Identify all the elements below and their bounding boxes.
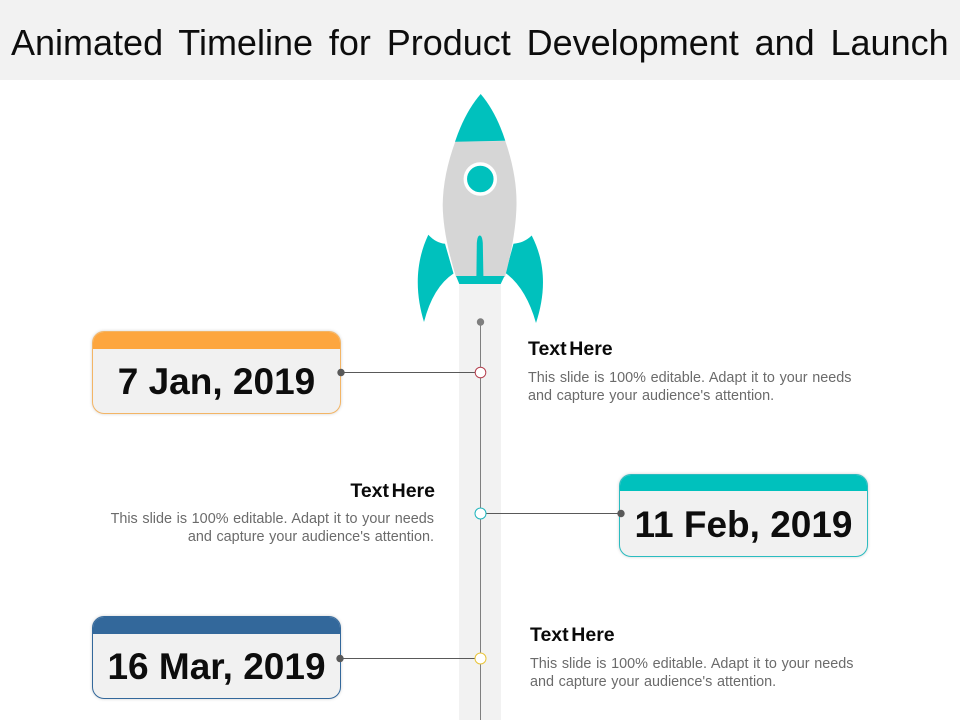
heading 1: Text Here [528, 338, 613, 360]
text block 1 [528, 338, 851, 404]
body 3 [530, 656, 853, 690]
date card: 7 Jan, 2019: 7 Jan, 2019 [118, 361, 315, 402]
title: Animated Timeline for Product Development and Launch [11, 22, 949, 63]
date card: 16 Mar, 2019: 16 Mar, 2019 [107, 646, 326, 687]
text block 2 [110, 480, 435, 545]
icon: rocket [418, 94, 543, 323]
body 2: and capture your audience's attention. [188, 529, 434, 545]
date card: 16 Mar, 2019 [92, 616, 341, 699]
date card: 11 Feb, 2019 [619, 474, 868, 557]
body 3: and capture your audience's attention. [530, 674, 776, 690]
date card: 11 Feb, 2019: 11 Feb, 2019 [634, 504, 853, 545]
heading 3: Text Here [530, 624, 615, 646]
body 2: This slide is 100% editable. Adapt it to your needs [111, 511, 434, 527]
vertical timeline track [459, 284, 501, 720]
body 2 [110, 511, 434, 545]
title banner [0, 0, 960, 80]
body 1 [528, 370, 851, 404]
body 1: This slide is 100% editable. Adapt it to your needs [528, 370, 851, 386]
body 3: This slide is 100% editable. Adapt it to your needs [530, 656, 853, 672]
text block 3 [530, 624, 853, 690]
heading 2: Text Here [350, 480, 435, 502]
date card: 7 Jan, 2019 [92, 331, 341, 414]
body 1: and capture your audience's attention. [528, 388, 774, 404]
